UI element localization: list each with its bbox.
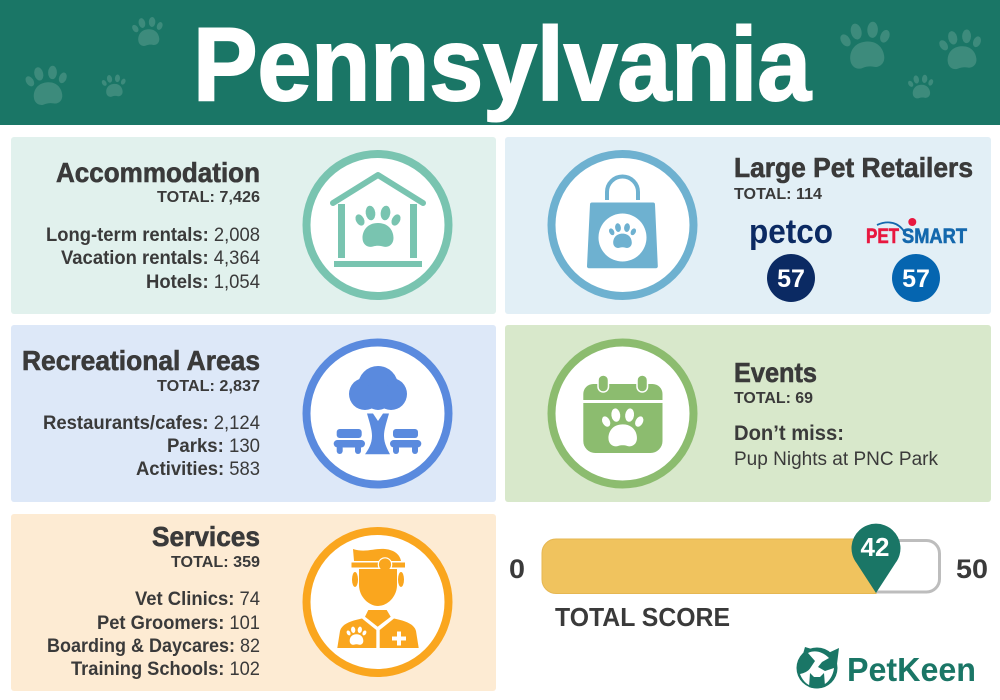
panel: recreational areas (11, 325, 496, 502)
logo: petco: petco (749, 213, 833, 251)
score maximum: 50 (956, 554, 988, 584)
total: retailers: TOTAL: 114 (734, 186, 822, 203)
icon: veterinarian (306, 531, 448, 673)
list: accommodation: Long-term rentals: 2,008 (46, 224, 260, 246)
icon: calendar with paw (552, 342, 694, 484)
list: recreational areas: Restaurants/cafes: 2,124 (43, 412, 260, 434)
heading: recreational areas: Recreational Areas (22, 345, 260, 376)
event name: Pup Nights at PNC Park (734, 449, 938, 470)
panel: large pet retailers (505, 137, 991, 314)
list: recreational areas: Parks: 130 (167, 435, 260, 457)
icon: shopping bag with paw (552, 154, 694, 296)
count: petco (767, 254, 815, 302)
panel: services (11, 514, 496, 691)
list: recreational areas (43, 412, 260, 480)
heading: accommodation: Accommodation (56, 157, 260, 188)
list: accommodation (46, 224, 260, 293)
logo: petsmart: SMART (902, 225, 967, 248)
bar track and fill (542, 539, 940, 594)
icon: tree and benches (306, 342, 448, 484)
list: services (47, 588, 260, 680)
list: services: Pet Groomers: 101 (97, 612, 260, 634)
list: services: Vet Clinics: 74 (135, 588, 260, 610)
score label: TOTAL SCORE (555, 602, 730, 632)
count: petsmart: 57 (902, 265, 930, 293)
score marker (851, 524, 900, 593)
list: accommodation: Vacation rentals: 4,364 (61, 247, 260, 269)
count: petsmart (892, 254, 940, 302)
logo: petkeen (796, 647, 976, 688)
score bar (509, 524, 988, 632)
logo: petsmart (866, 218, 967, 248)
heading: events: Events (734, 357, 817, 388)
title: Pennsylvania (193, 7, 812, 123)
panel: accommodation (11, 137, 496, 314)
heading: large pet retailers: Large Pet Retailers (734, 152, 973, 183)
list: recreational areas: Activities: 583 (136, 458, 260, 480)
panel: events (505, 325, 991, 502)
total: accommodation: TOTAL: 7,426 (157, 189, 260, 206)
list: services: Training Schools: 102 (71, 658, 260, 680)
logo: petkeen: PetKeen (847, 651, 976, 688)
logo: petsmart: PET (866, 225, 899, 248)
subheading: don't miss: Don’t miss: (734, 422, 844, 445)
score marker: 42 (861, 532, 889, 562)
score minimum: 0 (509, 554, 525, 584)
total: recreational areas: TOTAL: 2,837 (157, 378, 260, 395)
header paw prints (23, 15, 985, 107)
total: services: TOTAL: 359 (171, 554, 260, 571)
list: services: Boarding & Daycares: 82 (47, 635, 260, 657)
heading: services: Services (152, 521, 260, 552)
count: petco: 57 (777, 265, 805, 293)
icon: house with paw (306, 154, 448, 296)
total: events: TOTAL: 69 (734, 390, 813, 407)
header banner (0, 0, 1000, 125)
list: accommodation: Hotels: 1,054 (146, 271, 260, 293)
